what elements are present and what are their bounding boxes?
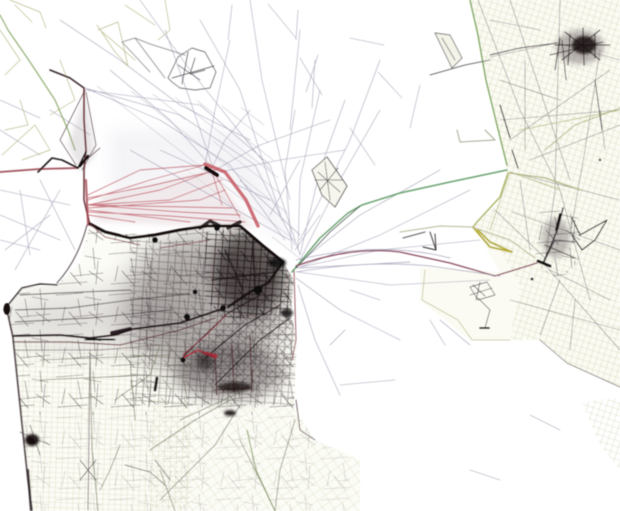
trail: Bay Bridge [292,0,580,272]
trail: downtown San Francisco dense core [205,228,296,360]
trail: Mission and SoMa grid [183,280,293,395]
trail: southern San Francisco neighbourhoods [20,345,315,511]
land: East Bay street network [420,0,620,470]
trail: Oakland streets and Lake Merritt [403,33,620,387]
trail: Geary and Golden Gate Park corridors [4,290,225,510]
land: San Francisco street network [0,220,370,511]
contours: Marin headlands and Tiburon [0,0,170,160]
haze: density under dense traces [0,230,295,405]
trail: Berkeley campus cluster [550,28,610,130]
trail: San Francisco north shore [4,221,283,310]
trail: green road north from the bridge [0,15,75,150]
trail: Angel Island loop [122,38,216,90]
trail: ferry to Oakland [296,249,537,276]
island: Treasure Island [312,157,347,207]
hot spots: San Francisco clusters [180,225,262,363]
trail: red ferry routes across the bay [86,164,258,226]
trail: Golden Gate Bridge and Sausalito [0,70,100,283]
